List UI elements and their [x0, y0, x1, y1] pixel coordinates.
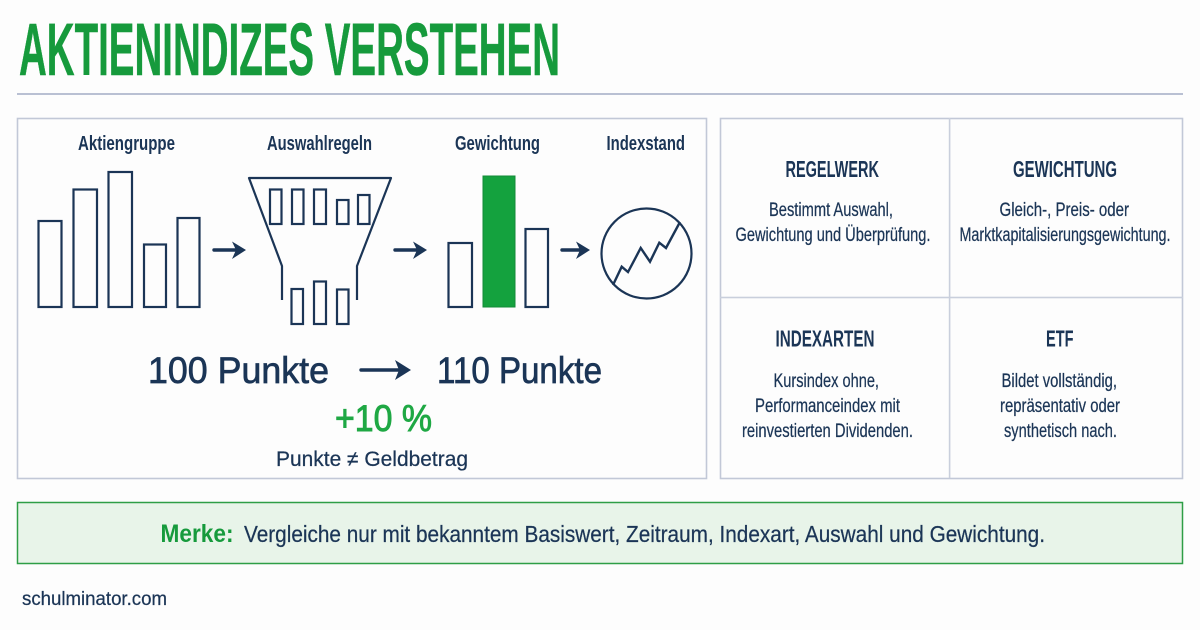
cell: Regelwerk: [736, 156, 930, 246]
cell: ETF: repräsentativ oder: [1000, 396, 1121, 417]
chart: stock group bars: [38, 172, 200, 307]
cell: Gewichtung: GEWICHTUNG: [1013, 156, 1117, 182]
icon: index level chart in circle: [602, 208, 692, 298]
cell: Gewichtung: [960, 156, 1170, 246]
arrow: points increase: [361, 360, 411, 380]
heading: Aktiengruppe: Aktiengruppe: [78, 132, 175, 155]
cell: Indexarten: INDEXARTEN: [776, 326, 874, 352]
panel: index process: [18, 118, 706, 478]
text: 110 Punkte: 110 Punkte: [437, 350, 602, 391]
footer: source: schulminator.com: [22, 588, 167, 610]
arrow: group to rules: [214, 242, 246, 259]
cell: ETF: synthetisch nach.: [1004, 421, 1117, 442]
cell: Indexarten: [742, 326, 913, 442]
title: AKTIENINDIZES VERSTEHEN: [19, 8, 560, 91]
callout: remember note: Merke:: [160, 520, 234, 548]
panel: key terms grid: [720, 118, 1183, 478]
heading: Gewichtung: Gewichtung: [455, 132, 540, 155]
text: 100 Punkte: 100 Punkte: [148, 350, 329, 391]
cell: Regelwerk: Gewichtung und Überprüfung.: [736, 225, 930, 246]
cell: Indexarten: Performanceindex mit: [755, 396, 901, 417]
text: points are not money: Punkte ≠ Geldbetrag: [276, 447, 468, 471]
text: plus ten percent: +10 %: [335, 398, 432, 439]
heading: Indexstand: Indexstand: [606, 132, 685, 155]
cell: Gewichtung: Gleich-, Preis- oder: [1000, 200, 1130, 221]
callout: remember note: Vergleiche nur mit bekanntem Basiswert, Zeitraum, Indexart, Auswahl und Gewichtung.: [244, 521, 1045, 547]
heading: Auswahlregeln: Auswahlregeln: [267, 132, 372, 155]
cell: Regelwerk: Bestimmt Auswahl,: [769, 200, 893, 221]
cell: Regelwerk: REGELWERK: [786, 156, 879, 182]
callout: remember note: [18, 502, 1182, 564]
cell: Indexarten: Kursindex ohne,: [774, 371, 879, 392]
cell: Indexarten: reinvestierten Dividenden.: [742, 421, 913, 442]
arrow: weighting to index level: [562, 242, 590, 259]
cell: ETF: Bildet vollständig,: [1002, 371, 1117, 392]
chart: weighting bars: [448, 176, 548, 307]
cell: ETF: [1000, 326, 1121, 442]
cell: ETF: ETF: [1046, 326, 1074, 352]
icon: selection funnel: [249, 178, 391, 324]
arrow: rules to weighting: [395, 242, 427, 259]
